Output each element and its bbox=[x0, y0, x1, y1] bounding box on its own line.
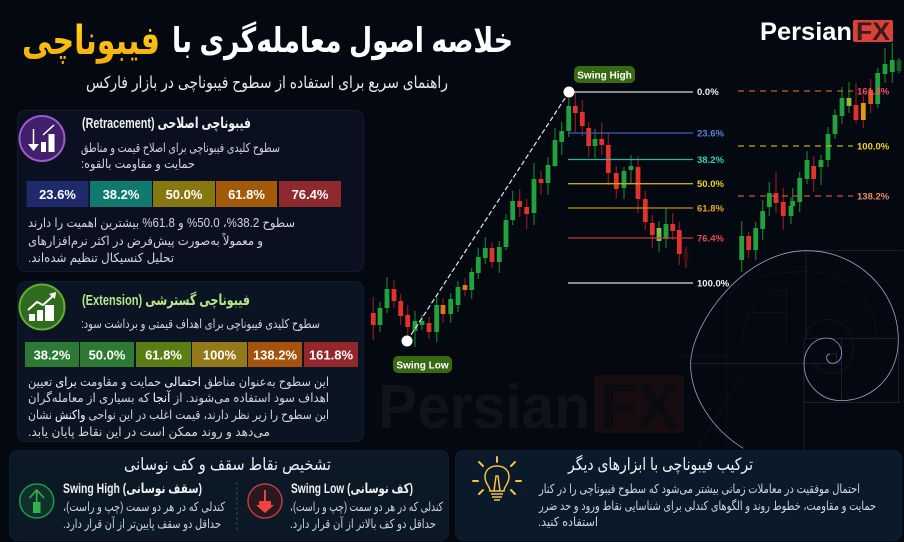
extension level chips: 100% bbox=[203, 348, 237, 362]
swing high text bbox=[63, 481, 225, 532]
retracement level chips: 76.4% bbox=[292, 187, 329, 202]
retracement level labels: 23.6% bbox=[697, 128, 724, 140]
icon: extension bbox=[20, 284, 64, 330]
retracement level labels: 38.2% bbox=[697, 155, 724, 166]
icon: arrow down bbox=[248, 484, 282, 518]
title: خلاصه اصول معامله‌گری با bbox=[172, 21, 513, 61]
label: swing low bbox=[393, 356, 452, 373]
heading: تشخیص نقاط سقف و کف نوسانی bbox=[124, 455, 331, 474]
icon: arrow up bbox=[20, 484, 54, 518]
logo: FX bbox=[856, 18, 890, 46]
description: حمایت و مقاومت بالقوه: bbox=[81, 157, 195, 172]
body text: اهداف سود استفاده می‌شوند. از آنجا که بسیاری از معامله‌گران bbox=[28, 390, 329, 406]
swing low text bbox=[290, 481, 443, 532]
title: فیبوناچی bbox=[22, 19, 160, 64]
panel: swing points bbox=[10, 450, 448, 540]
retracement level labels: 61.8% bbox=[697, 204, 724, 214]
retracement level labels: 0.0% bbox=[697, 87, 719, 98]
extension level chips: 50.0% bbox=[89, 348, 126, 362]
extension level chips: 161.8% bbox=[309, 348, 353, 362]
body text: سطوح 38.2%، 50.0% و 61.8% بیشترین اهمیت را دارند bbox=[28, 216, 295, 231]
body text: استفاده کنید. bbox=[538, 515, 598, 529]
swing low text: حداقل دو کف بالاتر از آن قرار دارد. bbox=[290, 516, 436, 532]
label: swing high: Swing High bbox=[577, 70, 632, 82]
label: swing low: Swing Low bbox=[396, 360, 449, 372]
icon: light bulb bbox=[473, 457, 521, 500]
swing high text: کندلی که در هر دو سمت (چپ و راست)، bbox=[63, 500, 225, 515]
body text: می‌دهد و روند ممکن است در این نقاط پایان یابد. bbox=[28, 425, 270, 440]
description: سطوح کلیدی فیبوناچی برای اهداف قیمتی و برداشت سود: bbox=[81, 317, 320, 332]
description: سطوح کلیدی فیبوناچی برای اصلاح قیمت و مناطق bbox=[81, 141, 280, 156]
extension level chips: 61.8% bbox=[145, 348, 182, 362]
retracement level chips: 61.8% bbox=[228, 187, 265, 202]
swing low text: (کف نوسانی) Swing Low bbox=[291, 481, 413, 496]
body text bbox=[28, 375, 329, 440]
logo: Persian bbox=[760, 18, 852, 46]
title bbox=[22, 19, 513, 64]
swing low text: کندلی که در هر دو سمت (چپ و راست)، bbox=[290, 500, 443, 515]
body text: این سطوح به‌عنوان مناطق احتمالی حمایت و مقاومت برای تعیین bbox=[28, 375, 329, 390]
retracement level chips: 38.2% bbox=[103, 187, 140, 202]
subtitle: راهنمای سریع برای استفاده از سطوح فیبوناچی در بازار فارکس bbox=[86, 74, 448, 93]
extension level labels: 138.2% bbox=[857, 192, 890, 202]
body text bbox=[538, 482, 876, 529]
extension level chips: 38.2% bbox=[34, 348, 71, 362]
retracement level labels: 50.0% bbox=[697, 179, 724, 190]
panel: combining with other tools bbox=[456, 450, 902, 540]
label: swing high bbox=[574, 66, 635, 83]
golden spiral decoration bbox=[680, 251, 903, 450]
description bbox=[81, 141, 280, 172]
left candlestick chart bbox=[373, 93, 686, 347]
retracement level chips: 23.6% bbox=[39, 187, 76, 202]
retracement level labels: 76.4% bbox=[697, 234, 724, 244]
extension level labels: 161.8% bbox=[857, 86, 890, 98]
panel: retracement bbox=[18, 110, 364, 272]
swing high text: حداقل دو سقف پایین‌تر از آن قرار دارد. bbox=[63, 516, 221, 532]
fibonacci extension levels bbox=[738, 91, 853, 196]
extension level labels: 100.0% bbox=[857, 142, 890, 152]
extension level chips bbox=[25, 342, 358, 367]
fibonacci retracement levels bbox=[568, 92, 693, 283]
watermark: PersianFX: Persian bbox=[378, 373, 590, 442]
swing high text: (سقف نوسانی) Swing High bbox=[63, 481, 202, 496]
icon: retracement bbox=[20, 116, 64, 161]
retracement level labels: 100.0% bbox=[697, 278, 730, 290]
heading: فیبوناچی اصلاحی (Retracement) bbox=[82, 115, 251, 133]
right candlestick chart bbox=[742, 43, 899, 272]
extension level chips: 138.2% bbox=[253, 348, 297, 362]
body text: تحلیل کنسیکال تنظیم شده‌اند. bbox=[28, 251, 174, 266]
retracement level chips bbox=[26, 181, 341, 207]
retracement level chips: 50.0% bbox=[166, 187, 203, 202]
body text bbox=[28, 216, 295, 266]
retracement level labels bbox=[697, 87, 730, 290]
heading: ترکیب فیبوناچی با ابزارهای دیگر bbox=[567, 454, 753, 475]
heading: فیبوناچی گسترشی (Extension) bbox=[82, 291, 250, 310]
panel: extension bbox=[18, 282, 364, 442]
swing trend line bbox=[402, 86, 574, 346]
extension level labels bbox=[857, 86, 890, 202]
watermark: PersianFX: FX bbox=[600, 372, 678, 441]
body text: و معمولاً به‌صورت پیش‌فرض در اکثر نرم‌افزارهای bbox=[28, 232, 263, 249]
body text: این سطوح را زیر نظر دارند، قیمت اغلب در این نواحی واکنش نشان bbox=[28, 408, 329, 423]
logo bbox=[760, 18, 893, 46]
divider bbox=[236, 482, 238, 532]
